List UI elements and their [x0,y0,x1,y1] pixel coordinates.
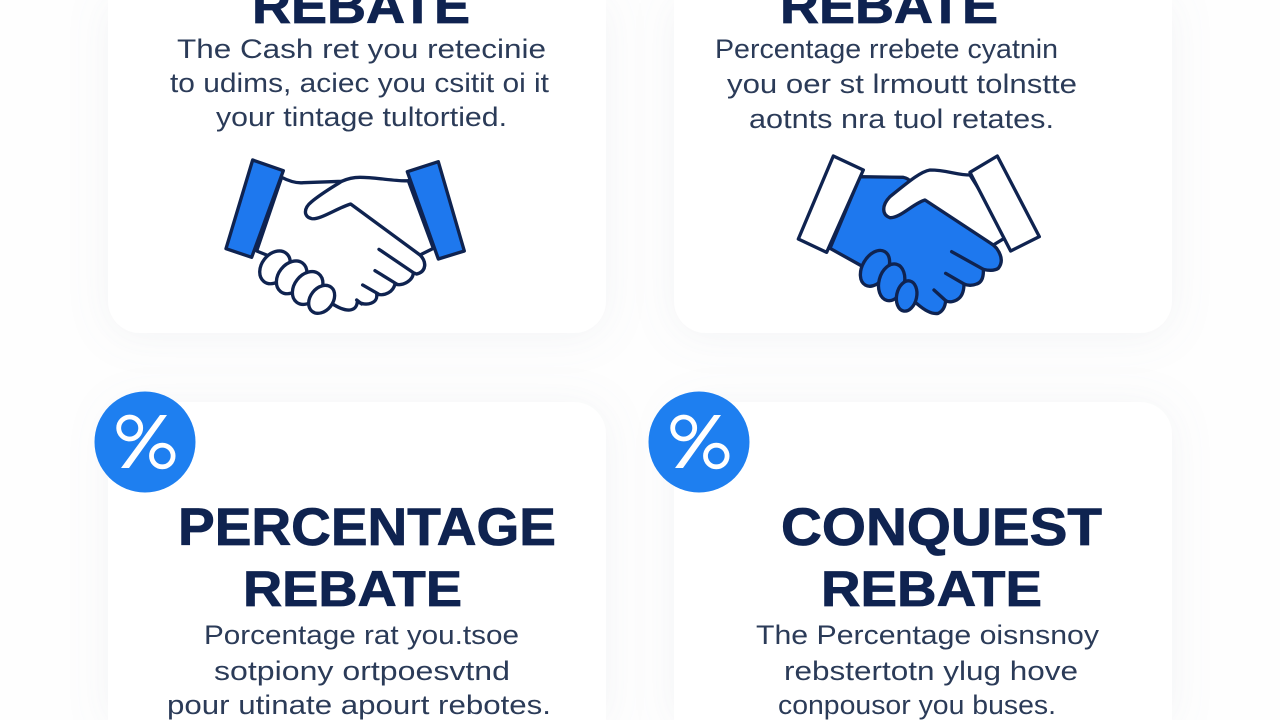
text block: conquest description: rebstertotn ylug hove [784,656,1078,686]
panel: percentage rebate bottom [94,392,606,720]
panel: percentage rebate top [674,0,1172,333]
text block: percentage description: pour utinate apourt rebotes. [167,690,551,720]
text block: percentage description: Porcentage rat you.tsoe [204,620,519,650]
text block: cash rebate description: to udims, aciec you csitit oi it [170,68,550,98]
text block: percentage rebate description: you oer st lrmoutt tolnstte [727,69,1077,99]
text block: percentage rebate description: aotnts nra tuol retates. [749,104,1054,134]
text block: percentage description: sotpiony ortpoesvtnd [214,656,510,686]
text block: percentage description [167,620,551,720]
text block: cash rebate description [170,34,550,132]
text block: cash rebate description: The Cash ret you retecinie [177,34,546,64]
heading: conquest rebate: CONQUEST [781,498,1102,557]
panel: conquest rebate [648,392,1172,720]
text block: conquest description: conpousor you buses. [778,690,1056,720]
heading: conquest rebate [781,498,1102,617]
heading: conquest rebate: REBATE [821,561,1042,617]
heading: percentage rebate: REBATE [243,561,462,617]
icon: blue handshake with white cuffs [798,156,1039,314]
text block: percentage rebate description: Percentage rrebete cyatnin [715,34,1058,64]
text block: cash rebate description: your tintage tultortied. [216,102,507,132]
text block: percentage rebate description [715,34,1077,134]
heading: percentage rebate [178,498,556,617]
heading: percentage rebate: PERCENTAGE [178,498,556,557]
icon: percent badge [94,392,196,492]
text block: conquest description: The Percentage oisnsnoy [756,620,1100,650]
icon: percent badge [648,392,750,492]
panel: cash rebate [108,0,606,333]
text block: conquest description [756,620,1100,720]
icon: white handshake with blue cuffs [226,160,464,318]
